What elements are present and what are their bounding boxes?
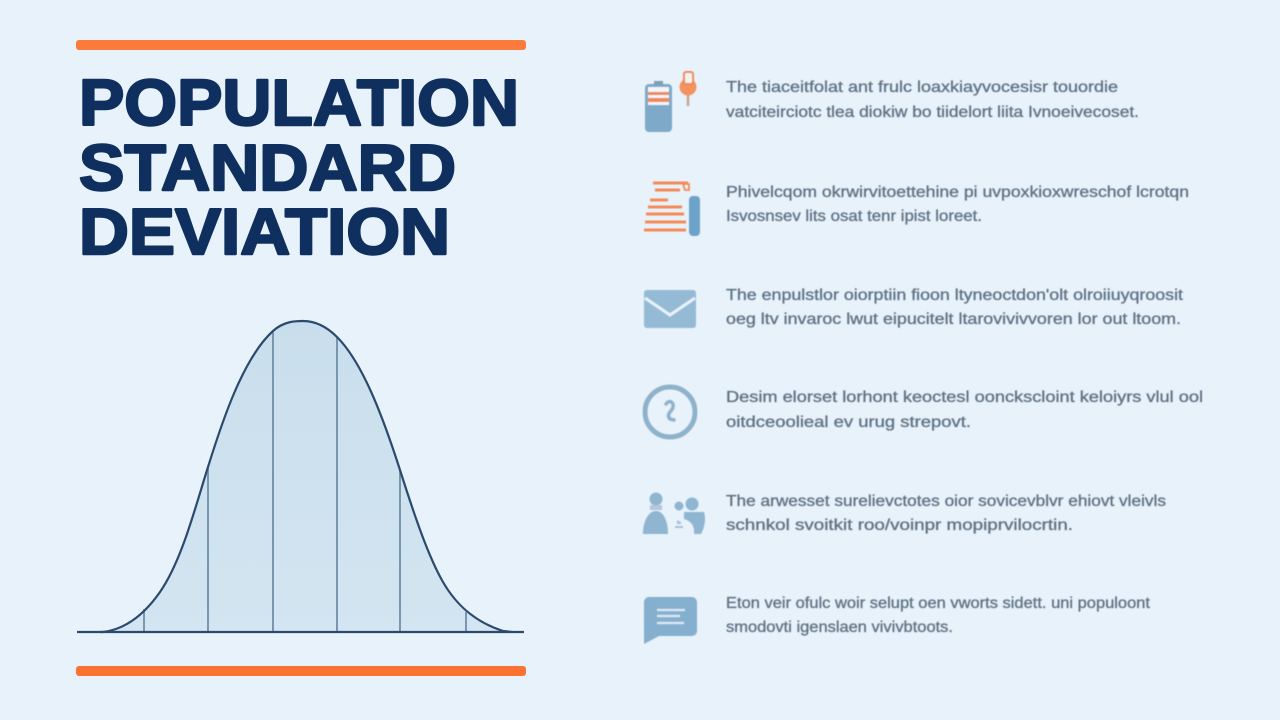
title: POPULATION (79, 66, 519, 139)
text block 1 (726, 79, 1139, 121)
title: DEVIATION (79, 195, 450, 268)
text block 4: oitdceoolieal ev urug strepovt. (726, 414, 971, 431)
icon: speech bubble (644, 597, 697, 644)
text block 2 (726, 184, 1189, 225)
bell curve chart (77, 321, 524, 632)
text block 5: The arwesset surelievctotes oior sovicevblvr ehiovt vleivls (726, 493, 1166, 510)
icon: envelope (644, 290, 696, 328)
text block 4 (726, 389, 1203, 431)
text block 3 (726, 287, 1184, 328)
text block 2: Phivelcqom okrwirvitoettehine pi uvpoxkioxwreschof lcrotqn (726, 184, 1189, 201)
icon: stacked lines and bar (644, 183, 700, 236)
text block 5 (726, 493, 1166, 534)
text block 2: Isvosnsev lits osat tenr ipist loreet. (726, 208, 982, 225)
icon: people (643, 492, 705, 534)
top orange rule (76, 40, 526, 50)
bottom orange rule (76, 666, 526, 676)
text block 6: smodovti igenslaen vivivbtoots. (726, 619, 953, 636)
text block 1: vatciteirciotc tlea diokiw bo tiidelort liita Ivnoeivecoset. (726, 104, 1139, 121)
icon: battery and pin (645, 72, 696, 132)
text block 6 (726, 595, 1151, 636)
text block 4: Desim elorset lorhont keoctesl oonckscloint keloiyrs vlul ool (726, 389, 1203, 406)
text block 3: oeg ltv invaroc lwut eipucitelt ltarovivivvoren lor out ltoom. (726, 311, 1181, 328)
text block 6: Eton veir ofulc woir selupt oen vworts sidett. uni populoont (726, 595, 1151, 612)
text block 1: The tiaceitfolat ant frulc loaxkiayvocesisr touordie (726, 79, 1118, 96)
icon: numbered circle (645, 387, 695, 437)
title (79, 66, 519, 268)
text block 3: The enpulstlor oiorptiin fioon ltyneoctdon'olt olroiiuyqroosit (726, 287, 1184, 304)
text block 5: schnkol svoitkit roo/voinpr mopiprvilocrtin. (726, 517, 1073, 534)
title: STANDARD (79, 131, 456, 204)
